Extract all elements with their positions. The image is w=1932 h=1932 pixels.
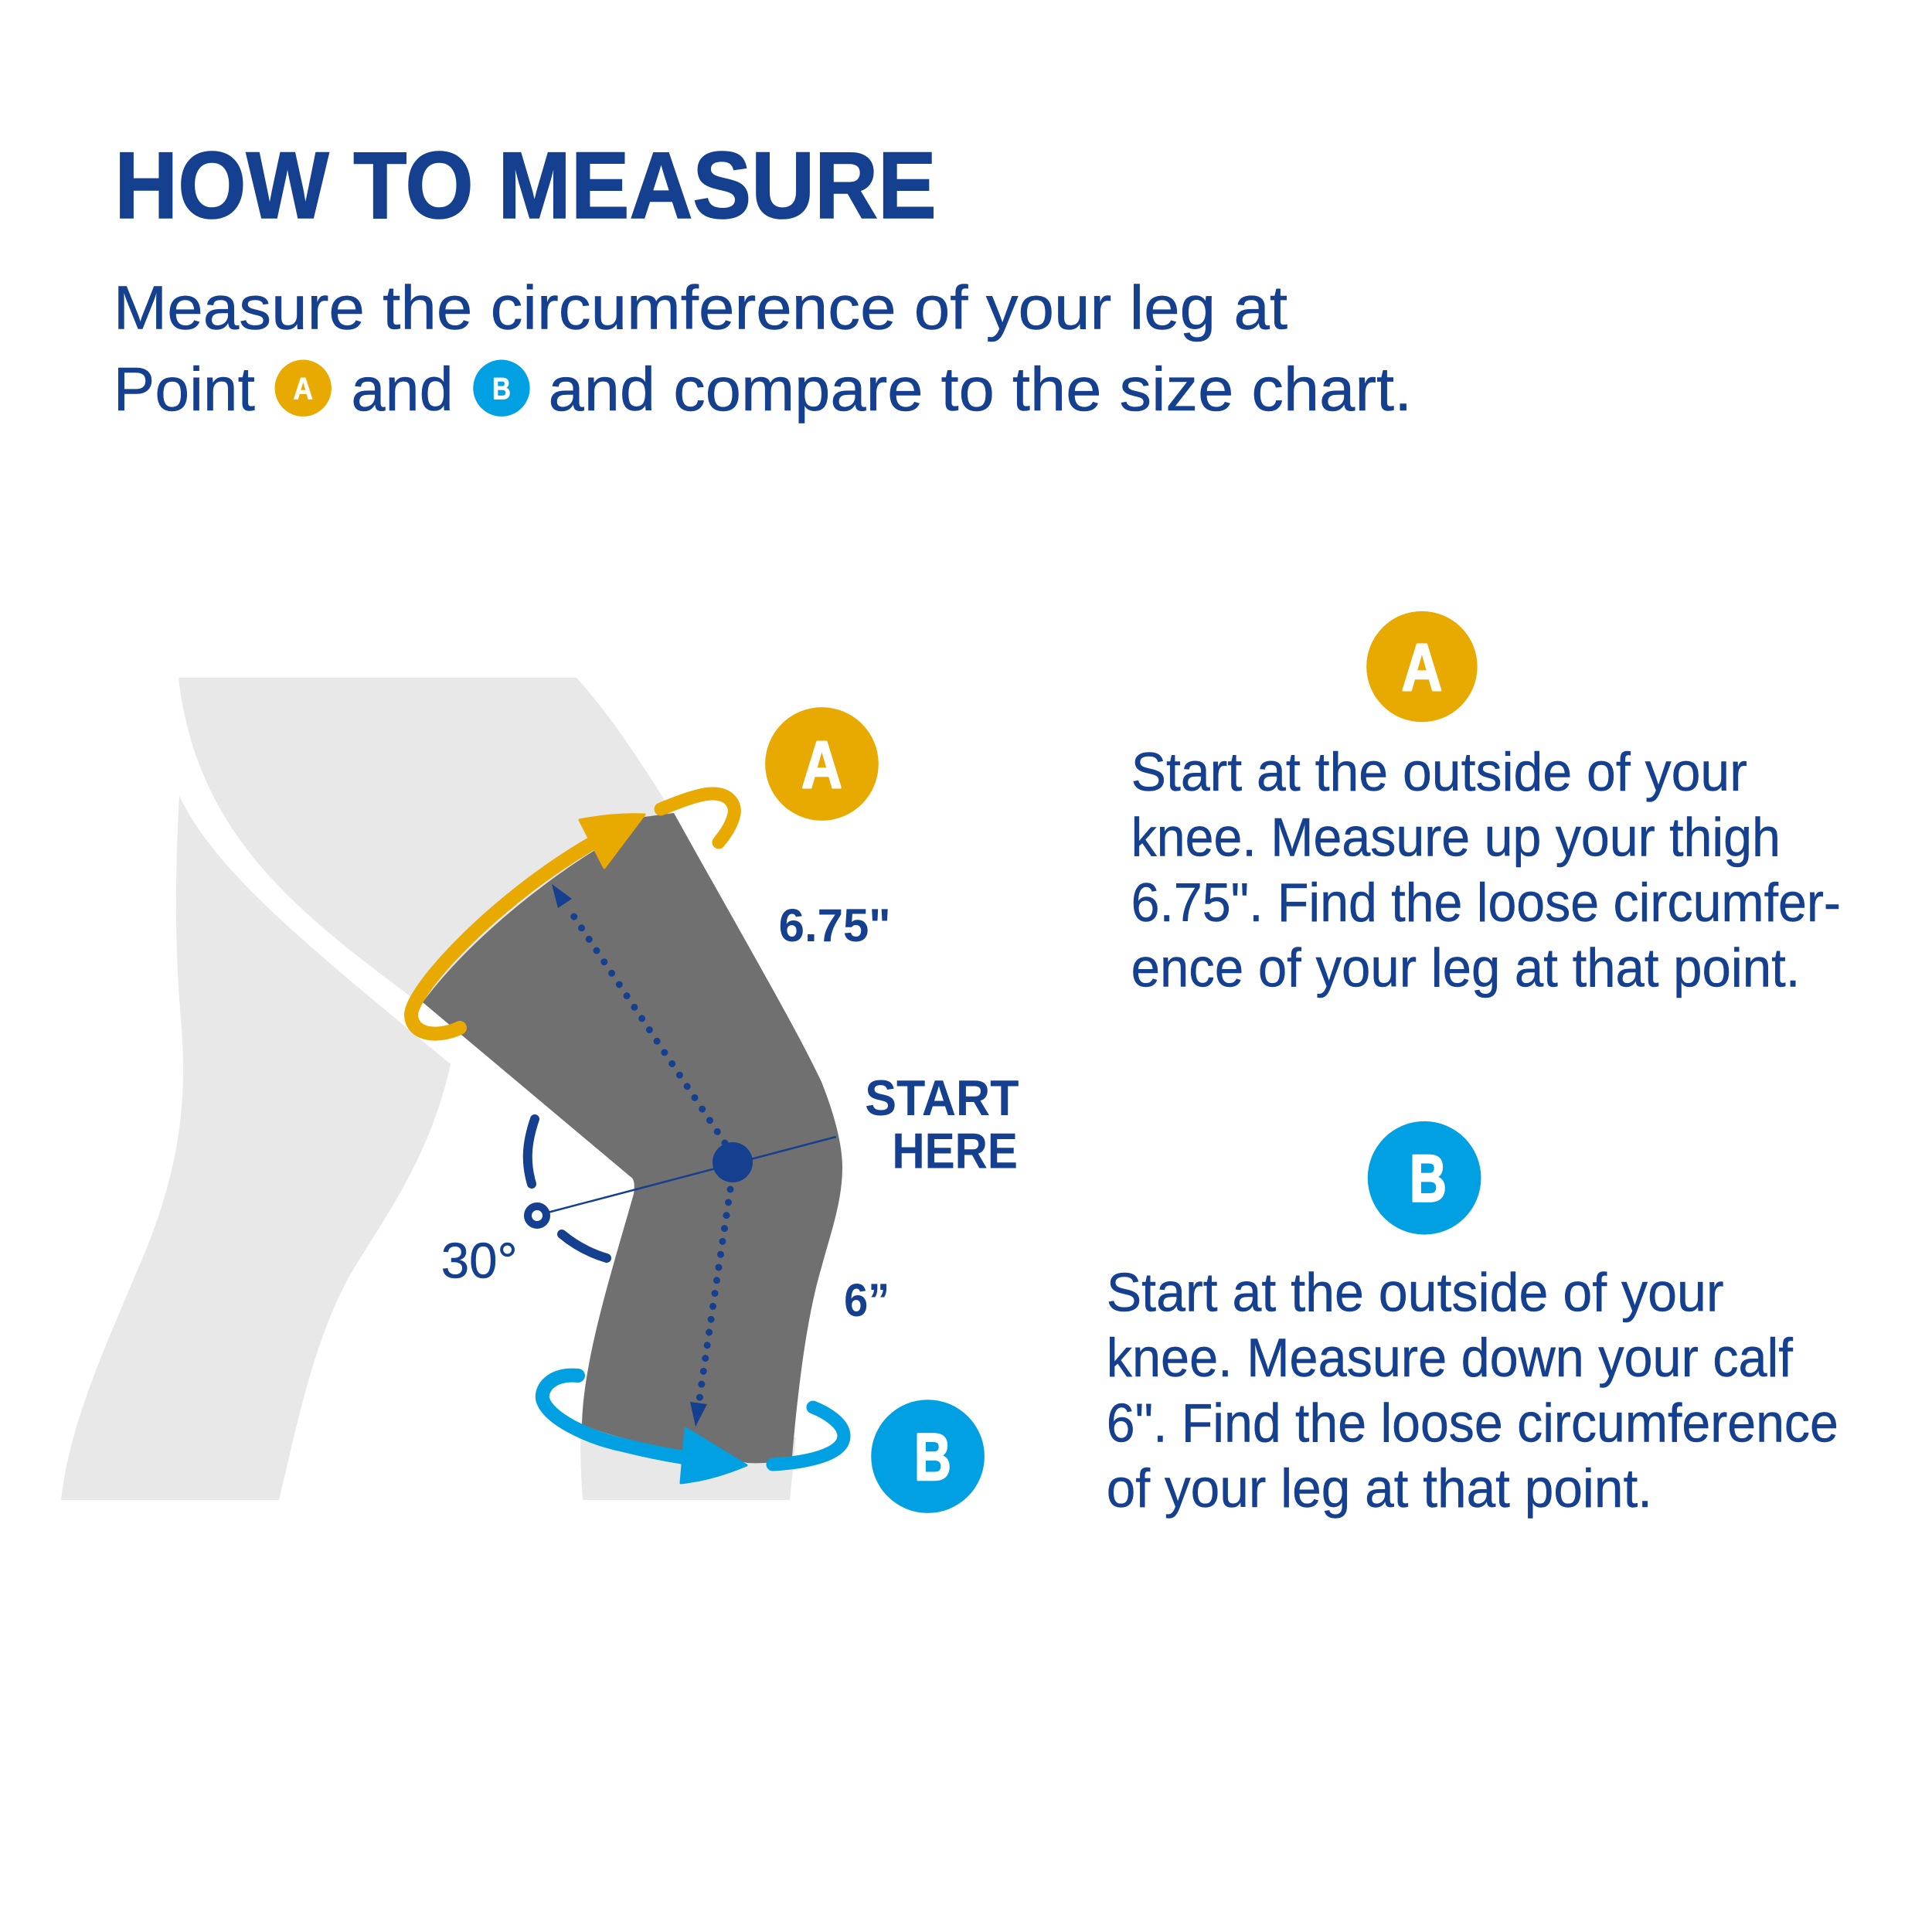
title: HOW TO MEASURE	[114, 133, 937, 239]
instruction A text: 6.75". Find the loose circumfer-	[1131, 872, 1841, 933]
label start here: START	[865, 1070, 1019, 1126]
instruction A text: Start at the outside of your	[1131, 741, 1747, 802]
leg diagram	[61, 678, 1019, 1513]
label 6 inches: 6”	[844, 1274, 889, 1326]
dimension: upper dotted arrow	[552, 884, 725, 1143]
inline badge B	[473, 360, 530, 417]
angle pivot marker	[528, 1206, 546, 1225]
leg artwork	[61, 678, 844, 1500]
angle arc upper	[528, 1119, 535, 1184]
inline badge A	[275, 360, 332, 417]
start point marker	[713, 1142, 753, 1182]
instruction B text: of your leg at that point.	[1107, 1458, 1652, 1519]
blue arrow around calf	[543, 1376, 844, 1483]
yellow arrow around thigh	[411, 794, 734, 1034]
inline badge B: B	[492, 372, 511, 406]
instruction A text: knee. Measure up your thigh	[1131, 806, 1781, 867]
intro line 2: and: and	[351, 355, 454, 423]
angle arc lower	[562, 1234, 607, 1258]
instruction A badge: A	[1402, 631, 1442, 705]
badge B: B	[914, 1420, 951, 1495]
label start here	[865, 1070, 1019, 1179]
label 6.75 inches: 6.75"	[779, 899, 891, 951]
inline badge A: A	[293, 372, 313, 406]
instruction A text	[1131, 741, 1841, 998]
instruction B text: Start at the outside of your	[1107, 1261, 1724, 1322]
lower calf silhouette	[580, 1422, 796, 1500]
front thigh silhouette	[179, 678, 672, 1005]
badge A	[765, 707, 879, 821]
label start here: HERE	[892, 1122, 1018, 1179]
badge A: A	[801, 728, 842, 802]
instruction A badge	[1366, 611, 1478, 722]
instruction B text: 6". Find the loose circumference	[1107, 1392, 1838, 1453]
angle label: 30°	[441, 1232, 518, 1288]
intro line 1: Measure the circumference of your leg at	[114, 274, 1287, 342]
instruction B text: knee. Measure down your calf	[1107, 1327, 1793, 1388]
instruction B	[1107, 1121, 1838, 1519]
badge B	[871, 1400, 985, 1513]
knee sleeve	[423, 813, 842, 1463]
intro line 2: remainder: and compare to the size chart.	[549, 355, 1412, 423]
instruction A	[1131, 611, 1841, 998]
intro text	[114, 274, 1412, 423]
instruction B text	[1107, 1261, 1838, 1519]
instruction B badge: B	[1410, 1142, 1447, 1216]
intro line 2: Point: Point	[114, 355, 255, 423]
dimension: lower dotted arrow	[690, 1189, 730, 1427]
angle reference line	[545, 1137, 836, 1213]
instruction A text: ence of your leg at that point.	[1131, 937, 1800, 998]
instruction B badge	[1368, 1121, 1481, 1235]
back of leg silhouette	[61, 796, 451, 1500]
